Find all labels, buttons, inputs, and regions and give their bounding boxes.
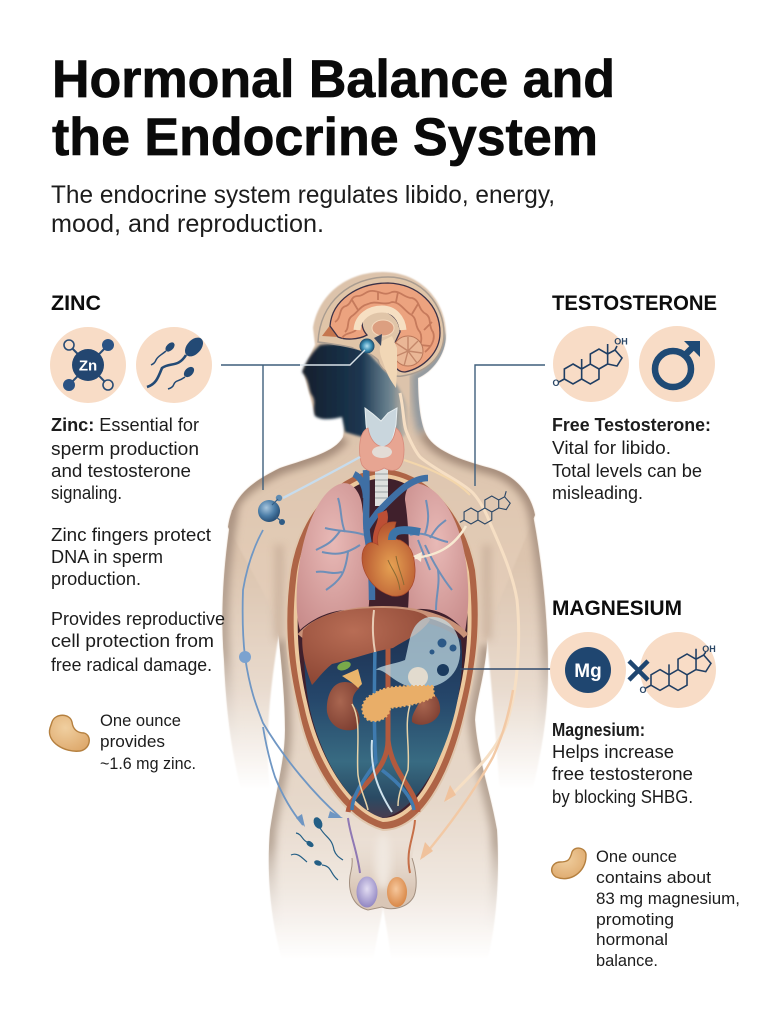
blood vessels: [354, 470, 428, 600]
icon: blocked testosterone molecule: [639, 632, 716, 708]
skull band: [318, 277, 444, 376]
zinc description: [51, 415, 199, 503]
magnesium ounce note: [596, 848, 740, 970]
panel: magnesium: [550, 597, 740, 970]
brain: [330, 283, 440, 388]
subtitle: mood, and reproduction.: [51, 210, 324, 238]
cerebellum: [393, 336, 423, 366]
abdominal cavity: [304, 618, 462, 818]
reproductive ducts: [348, 818, 360, 873]
liver: [302, 608, 430, 685]
gallbladder: [336, 660, 352, 672]
icon: testosterone molecule: [552, 326, 629, 402]
thyroid: [360, 428, 404, 471]
testosterone molecule on shoulder: [460, 491, 510, 524]
arrow heads: [296, 552, 456, 860]
left lung: [297, 483, 369, 630]
icon: zinc atom: Zn: [79, 358, 97, 374]
scrotum: [350, 834, 416, 910]
zinc ounce note: provides: [100, 733, 165, 751]
torso cavity wall: [286, 468, 479, 830]
testosterone description: Vital for libido.: [552, 438, 671, 458]
magnesium ounce note: contains about: [596, 869, 711, 887]
testes: [356, 876, 378, 908]
sperm cells on thigh: [291, 816, 343, 880]
icon: zinc atom: [50, 327, 126, 403]
anatomical body illustration: [222, 272, 548, 970]
right arm: [480, 510, 548, 800]
stomach molecules: [430, 638, 456, 676]
magnesium ounce note: hormonal: [596, 931, 668, 949]
testosterone description: Free Testosterone:: [552, 415, 711, 435]
icon: sperm: [136, 327, 212, 403]
zinc fingers text: Zinc fingers protect: [51, 525, 211, 545]
vessels of abdomen: [348, 648, 418, 812]
magnesium ounce note: promoting: [596, 911, 674, 929]
zinc fingers text: DNA in sperm: [51, 547, 163, 567]
testosterone description: [552, 415, 711, 503]
subtitle: The endocrine system regulates libido, energy,: [51, 181, 555, 209]
zinc fingers text: production.: [51, 569, 141, 589]
icon: male symbol: [639, 326, 715, 402]
title: Hormonal Balance and: [52, 50, 615, 109]
reproductive protection text: cell protection from: [51, 631, 214, 651]
brain stem: [380, 336, 397, 388]
reproductive protection text: [51, 609, 225, 675]
zinc molecule on shoulder: [258, 495, 285, 525]
icon: blocked testosterone molecule: OH: [702, 644, 716, 654]
magnesium ounce note: 83 mg magnesium,: [596, 890, 740, 908]
panel: testosterone: [552, 292, 717, 503]
thalamus: [372, 320, 394, 336]
icon: block cross: [629, 661, 648, 680]
zinc description: sperm production: [51, 439, 199, 459]
right lung: [405, 483, 468, 632]
corpus callosum: [357, 309, 403, 330]
connector lines: [221, 350, 551, 669]
blood cell node on arm: [239, 651, 251, 663]
zinc fingers text: [51, 525, 211, 589]
heart: [362, 522, 415, 596]
icon: magnesium: [550, 632, 626, 708]
title: [52, 50, 615, 167]
magnesium description: Magnesium:: [552, 720, 645, 740]
magnesium description: [552, 720, 693, 807]
zinc ounce note: [100, 712, 196, 773]
diaphragm: [300, 609, 466, 636]
stomach: [376, 617, 460, 688]
adrenal gland: [342, 669, 362, 688]
pituitary gland: [352, 338, 378, 354]
kidneys: [327, 682, 360, 730]
magnesium description: Helps increase: [552, 742, 674, 762]
icon: cashew: [552, 848, 586, 879]
icon: blocked testosterone molecule: O: [639, 685, 647, 695]
bronchi: [316, 498, 452, 610]
zinc ounce note: One ounce: [100, 712, 181, 730]
icon: testosterone molecule: O: [552, 378, 560, 388]
cartilage larynx: [365, 408, 397, 450]
icon: magnesium: Mg: [574, 661, 602, 682]
icon: cashew: [49, 715, 89, 751]
testosterone heading: TESTOSTERONE: [552, 292, 717, 315]
trachea: [375, 468, 388, 506]
icon: testosterone molecule: OH: [614, 336, 628, 346]
zinc description: Zinc: Essential for: [51, 415, 199, 435]
testosterone description: misleading.: [552, 483, 643, 503]
panel: zinc: [49, 292, 225, 773]
zinc ounce note: ~1.6 mg zinc.: [100, 755, 196, 773]
endocrine signal lines: [243, 393, 519, 857]
body edge shading: [222, 335, 548, 970]
testosterone description: Total levels can be: [552, 461, 702, 481]
body silhouette: [228, 272, 535, 970]
magnesium description: by blocking SHBG.: [552, 787, 693, 807]
subtitle: [51, 181, 555, 238]
magnesium ounce note: balance.: [596, 952, 658, 970]
magnesium description: free testosterone: [552, 764, 693, 784]
dark face silhouette: [302, 344, 410, 441]
left arm: [222, 510, 285, 800]
reproductive protection text: Provides reproductive: [51, 609, 225, 629]
zinc heading: ZINC: [51, 292, 101, 315]
pancreas: [362, 686, 434, 721]
zinc description: signaling.: [51, 483, 122, 503]
skull base wedge: [322, 324, 338, 337]
magnesium ounce note: One ounce: [596, 848, 677, 866]
title: the Endocrine System: [52, 108, 598, 167]
reproductive protection text: free radical damage.: [51, 655, 212, 675]
zinc description: and testosterone: [51, 461, 191, 481]
magnesium heading: MAGNESIUM: [552, 597, 682, 620]
ureters: [352, 704, 410, 810]
